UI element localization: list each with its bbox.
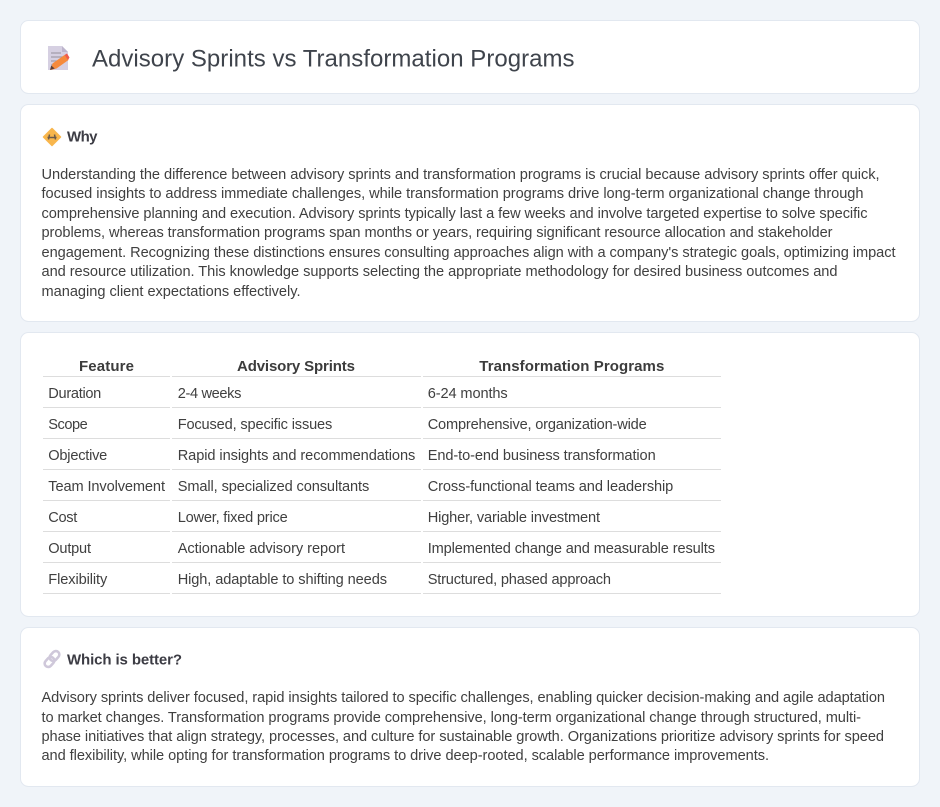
table header row [43, 358, 721, 376]
table header row: Advisory Sprints [237, 358, 355, 375]
table row: flexibility: Flexibility [48, 572, 108, 588]
table header row: Feature [79, 358, 134, 375]
text block: which is better paragraph: and flexibility, while opting for transformation programs to drive deep-rooted, scalable performance improvements. [42, 748, 769, 764]
table row: output: Actionable advisory report [178, 541, 345, 557]
text block: why paragraph: comprehensive planning and execution. Advisory sprints typically last a few weeks and involve targeted expertise to solve specific [42, 206, 868, 222]
heading: which is better: Which is better? [67, 652, 182, 668]
table row: duration: Duration [48, 386, 101, 402]
table header row: Transformation Programs [479, 358, 664, 375]
table row: duration: 6-24 months [428, 386, 508, 402]
panel: header [20, 20, 920, 94]
table row: scope: Comprehensive, organization-wide [428, 417, 647, 433]
table row: team involvement: Small, specialized consultants [178, 479, 369, 495]
icon: warning diamond [44, 128, 60, 146]
table row: objective [43, 448, 721, 470]
panel: which is better [20, 628, 920, 786]
heading: why: Why [67, 128, 98, 146]
panel: why [20, 104, 920, 322]
table row: output: Implemented change and measurable results [428, 541, 715, 557]
table row: team involvement: Team Involvement [48, 479, 165, 495]
text block: why paragraph: problems, whereas transformation programs span months or years, requiring significant resource allocation and stakeholder [42, 225, 833, 241]
icon: document with pencil [48, 46, 70, 70]
table row: team involvement [43, 479, 721, 500]
text block: which is better paragraph: to market changes. Transformation programs provide comprehensive, long-term organizational change through structured, multi- [42, 710, 861, 726]
text block: why paragraph: Understanding the difference between advisory sprints and transformation programs is crucial because advisory sprints offer quick, [42, 167, 880, 183]
table row: duration [43, 386, 721, 408]
text block: why paragraph [42, 167, 896, 300]
table row: cost [43, 510, 721, 532]
panel: comparison table [20, 332, 920, 616]
title: Advisory Sprints vs Transformation Programs [92, 46, 574, 72]
table row: scope: Focused, specific issues [178, 417, 332, 433]
text block: which is better paragraph: phase initiatives that align strategy, processes, and culture for sustainable growth. Organizations prioritize advisory sprints for speed [42, 729, 884, 745]
table row: cost: Lower, fixed price [178, 510, 288, 526]
table row: objective: End-to-end business transformation [428, 448, 656, 464]
text block: which is better paragraph [42, 690, 885, 764]
text block: why paragraph: managing client expectations effectively. [42, 284, 300, 300]
text block: why paragraph: and resource utilization. This knowledge supports selecting the appropriate methodology for desired business outcomes and [42, 264, 838, 280]
table row: flexibility: Structured, phased approach [428, 572, 611, 588]
table row: output: Output [48, 541, 91, 557]
table row: objective: Objective [48, 448, 107, 464]
text block: why paragraph: engagement. Recognizing these distinctions ensures consulting approaches align with a company's strategic goals, optimizing impact [42, 245, 896, 261]
table row: output [43, 541, 721, 562]
table row: objective: Rapid insights and recommendations [178, 448, 415, 464]
table row: duration: 2-4 weeks [178, 386, 241, 402]
table row: scope [43, 417, 721, 438]
table row: scope: Scope [48, 417, 88, 433]
icon: chain link [43, 650, 61, 668]
text block: why paragraph: focused insights to address immediate challenges, while transformation programs drive long-term organizational change through [42, 186, 864, 202]
table row: cost: Higher, variable investment [428, 510, 600, 526]
table row: flexibility [43, 572, 721, 594]
table row: team involvement: Cross-functional teams and leadership [428, 479, 673, 495]
text block: which is better paragraph: Advisory sprints deliver focused, rapid insights tailored to specific challenges, enabling quicker decision-making and agile adaptation [42, 690, 885, 706]
table row: cost: Cost [48, 510, 77, 526]
table row: flexibility: High, adaptable to shifting needs [178, 572, 387, 588]
